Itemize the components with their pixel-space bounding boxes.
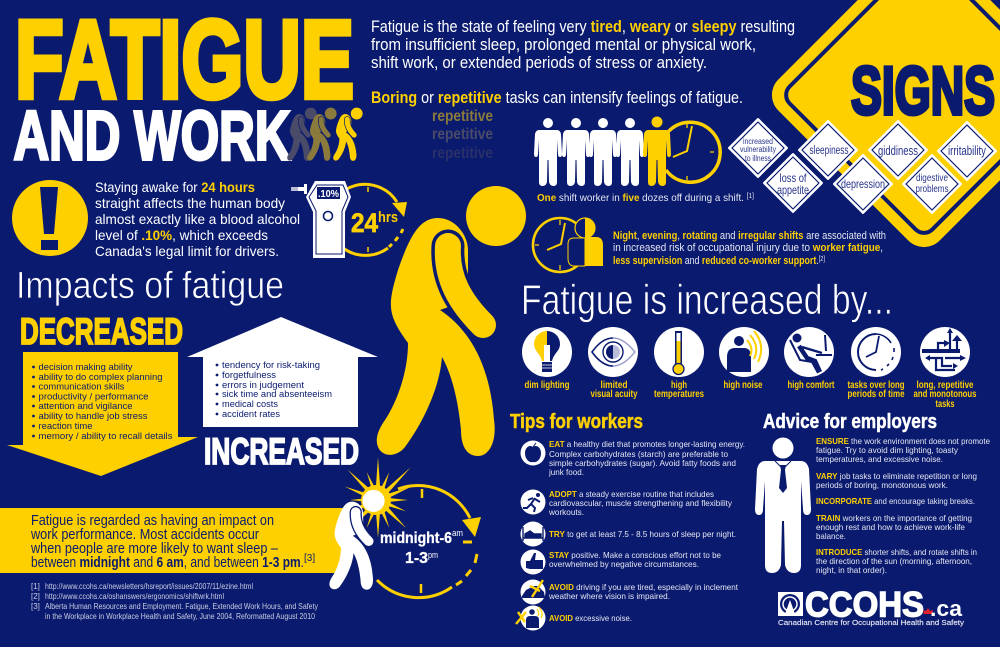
panel: work performance band: Fatigue is regarded as having an impact on bbox=[31, 513, 274, 529]
icon: exclamation bbox=[12, 180, 88, 256]
icon: bed bbox=[523, 527, 543, 541]
heading: fatigue is increased by: Fatigue is increased by... bbox=[521, 276, 893, 323]
text: tips: ADOPT a steady exercise routine that includes bbox=[549, 489, 714, 499]
arrow: up bbox=[187, 317, 378, 427]
text: tips: Complex carbohydrates (starch) are preferable to bbox=[549, 449, 728, 459]
icon: noise with cross bbox=[516, 607, 542, 628]
icon: 24 hour clock: hrs bbox=[378, 209, 398, 226]
icon: breathalyzer: .10% bbox=[318, 189, 339, 200]
title: fatigue: FATIGUE bbox=[15, 0, 354, 122]
text: fading repetitive: repetitive bbox=[432, 108, 493, 125]
panel: signs road sign bbox=[763, 0, 1000, 256]
text: one in five: [1] bbox=[747, 193, 754, 200]
panel: sign diamonds bbox=[729, 119, 996, 213]
text: advice: periods of boring, monotonous work. bbox=[816, 480, 948, 490]
panel: advice for employers bbox=[755, 411, 990, 575]
icon: breathalyzer bbox=[291, 181, 351, 258]
text: one in five: One shift worker in five dozes off during a shift. bbox=[537, 192, 751, 204]
logo: ccohs: .ca bbox=[930, 596, 963, 621]
icon: sun bbox=[340, 457, 413, 538]
list: increased items: accident rates bbox=[222, 409, 281, 419]
text: advice: INTRODUCE shorter shifts, and rotate shifts in bbox=[816, 547, 977, 557]
text: clock times: pm bbox=[428, 550, 438, 560]
panel: sign diamonds: giddiness bbox=[878, 144, 918, 158]
text: tips: TRY to get at least 7.5 - 8.5 hours of sleep per night. bbox=[549, 529, 736, 539]
text: factor labels: high noise bbox=[724, 380, 763, 391]
icon: dim lighting bbox=[534, 331, 560, 372]
list: increased items: sick time and absenteeism bbox=[222, 389, 332, 399]
icon: clock bbox=[666, 122, 720, 182]
icon: high temperatures bbox=[673, 331, 684, 374]
list: decreased items: communication skills bbox=[38, 382, 125, 392]
text: fading repetitive: repetitive bbox=[432, 126, 493, 143]
text: advice: INCORPORATE and encourage taking breaks. bbox=[816, 496, 975, 506]
text: footnotes: [2] bbox=[31, 592, 40, 601]
text: staying awake bbox=[95, 179, 300, 259]
panel: fatigue factors bbox=[522, 327, 977, 410]
text: advice: ENSURE the work environment does not promote bbox=[816, 436, 990, 446]
text: intro: Fatigue is the state of feeling very tired, weary or sleepy resulting bbox=[371, 18, 795, 36]
panel: sign diamonds: increased bbox=[743, 137, 773, 146]
list: increased items: tendency for risk-taking bbox=[222, 360, 320, 370]
text: footnotes: [3] bbox=[31, 602, 40, 611]
text: advice: enough rest and how to achieve work-life bbox=[816, 522, 965, 532]
panel: work performance band: work performance. Most accidents occur bbox=[30, 527, 259, 543]
panel: sign diamonds: sleepiness bbox=[810, 145, 849, 157]
panel: sign diamonds: problems bbox=[916, 184, 948, 195]
text: footnotes: http://www.ccohs.ca/newsletters/hsreport/issues/2007/11/ezine.html bbox=[45, 582, 253, 591]
text: intro bbox=[371, 18, 795, 107]
panel: sign diamonds: loss of bbox=[780, 171, 807, 185]
text: factor labels: periods of time bbox=[848, 389, 905, 400]
text: clock times: midnight-6 bbox=[380, 530, 452, 547]
text: footnotes: [1] bbox=[31, 582, 40, 591]
icon: fading walkers bbox=[287, 108, 363, 161]
panel: work performance band: [3] bbox=[304, 553, 315, 564]
text: advice: balance. bbox=[816, 531, 846, 541]
list: increased items: errors in judgement bbox=[222, 380, 305, 390]
heading: tips: Tips for workers bbox=[510, 411, 643, 433]
heading: advice: Advice for employers bbox=[763, 411, 937, 433]
text: footnotes bbox=[31, 582, 318, 621]
panel: night shifts bbox=[533, 218, 886, 272]
heading: increased: INCREASED bbox=[204, 431, 359, 472]
text: factor labels: and monotonous bbox=[914, 389, 977, 400]
text: tips: AVOID excessive noise. bbox=[549, 613, 632, 623]
text: advice: fatigue. Try to avoid dim lighting, toasty bbox=[816, 445, 959, 455]
arrow: down bbox=[7, 352, 198, 476]
icon: midnight clock and walker bbox=[329, 457, 481, 598]
logo: ccohs bbox=[778, 586, 964, 627]
text: tips: STAY positive. Make a conscious effort not to be bbox=[549, 550, 721, 560]
text: tips: overwhelmed by negative circumstances. bbox=[549, 559, 699, 569]
panel: night shifts: in increased risk of occupational injury due to worker fatigue, bbox=[613, 242, 883, 254]
text: footnotes: Alberta Human Resources and Employment. Fatigue, Extended Work Hours, and Safety bbox=[45, 602, 318, 611]
text: tips: weather where vision is impaired. bbox=[548, 591, 670, 601]
text: advice: temperatures, and excessive noise. bbox=[816, 454, 943, 464]
icon: high noise bbox=[727, 331, 761, 372]
text: tips bbox=[548, 439, 745, 623]
panel: decreased bbox=[7, 311, 198, 476]
text: factor labels bbox=[524, 380, 977, 410]
text: staying awake: Staying awake for 24 hours bbox=[95, 179, 255, 195]
panel: sign diamonds: irritability bbox=[948, 144, 987, 158]
panel: night shifts: less supervision and reduced co-worker support. bbox=[613, 255, 844, 267]
icon: limited visual acuity bbox=[592, 338, 635, 366]
icon: car with cross bbox=[522, 580, 545, 598]
icon: thumbs up bbox=[526, 553, 543, 569]
panel: sign diamonds: vulnerability bbox=[740, 145, 776, 154]
text: tips: EAT a healthy diet that promotes longer-lasting energy. bbox=[549, 439, 745, 449]
text: fading repetitive bbox=[432, 108, 493, 162]
text: advice: TRAIN workers on the importance of getting bbox=[816, 513, 972, 523]
icon: 24 hour clock bbox=[343, 184, 407, 255]
list: increased items: medical costs bbox=[222, 399, 279, 409]
text: advice: VARY job tasks to eliminate repetition or long bbox=[816, 471, 977, 481]
panel: night shifts: [2] bbox=[819, 256, 825, 263]
text: staying awake: Canada's legal limit for drivers. bbox=[95, 243, 279, 259]
text: advice bbox=[816, 436, 990, 575]
icon: tasks over long periods bbox=[858, 334, 894, 370]
text: clock times: am bbox=[452, 528, 463, 538]
text: tips: AVOID driving if you are tired, especially in inclement bbox=[549, 582, 739, 592]
heading: impacts of fatigue: Impacts of fatigue bbox=[16, 265, 284, 307]
panel: tips for workers bbox=[510, 411, 745, 630]
list: increased items bbox=[216, 360, 332, 419]
text: staying awake: straight affects the human body bbox=[95, 195, 285, 211]
text: staying awake: level of .10%, which exceeds bbox=[95, 227, 268, 243]
text: tips: cardiovascular, muscle strengthening and flexibility bbox=[549, 498, 733, 508]
list: decreased items: productivity / performance bbox=[38, 392, 148, 402]
text: factor labels: temperatures bbox=[654, 389, 704, 400]
text: footnotes: in the Workplace in Workplace Health and Safety, June 2004, Reformatted August 2010 bbox=[45, 612, 315, 621]
icon: high comfort bbox=[790, 334, 832, 373]
icon: employer figure bbox=[755, 438, 811, 573]
text: factor labels: visual acuity bbox=[590, 389, 638, 400]
text: intro: from insufficient sleep, prolonged mental or physical work, bbox=[371, 36, 756, 54]
text: staying awake: almost exactly like a blood alcohol bbox=[95, 211, 300, 227]
list: decreased items: decision making ability bbox=[38, 362, 133, 372]
list: decreased items: ability to handle job stress bbox=[38, 411, 148, 421]
panel: night shifts: Night, evening, rotating and irregular shifts are associated with bbox=[613, 230, 886, 242]
list: decreased items: ability to do complex planning bbox=[38, 372, 162, 382]
text: tips: simple carbohydrates (sugar). Avoid fatty foods and bbox=[549, 458, 736, 468]
text: advice: the direction of the sun (morning, afternoon, bbox=[816, 556, 972, 566]
panel: sign diamonds: digestive bbox=[916, 173, 948, 184]
title: and work: AND WORK bbox=[14, 96, 290, 174]
text: footnotes: http://www.ccohs.ca/oshanswers/ergonomics/shiftwrk.html bbox=[45, 592, 224, 601]
list: decreased items: attention and vigilance bbox=[38, 401, 132, 411]
panel: work performance band bbox=[0, 508, 345, 573]
panel: sign diamonds: to illness bbox=[745, 154, 771, 163]
text: factor labels: limited bbox=[600, 380, 628, 391]
icon: long repetitive tasks bbox=[922, 328, 966, 370]
text: intro: shift work, or extended periods of stress or anxiety. bbox=[371, 54, 707, 72]
icon: apple bbox=[525, 443, 541, 462]
text: advice: night, in that order). bbox=[816, 565, 887, 575]
text: tips: workouts. bbox=[548, 507, 584, 517]
text: factor labels: high comfort bbox=[788, 380, 835, 391]
list: increased items: forgetfulness bbox=[222, 370, 277, 380]
list: decreased items: reaction time bbox=[38, 421, 92, 431]
list: decreased items: memory / ability to recall details bbox=[38, 431, 173, 441]
text: clock times: 1-3 bbox=[405, 550, 428, 567]
number: 24 hrs: 24 bbox=[351, 208, 378, 238]
icon: large fatigued walker bbox=[377, 186, 526, 456]
panel: work performance band: between midnight and 6 am, and between 1-3 pm. bbox=[31, 555, 304, 571]
logo: ccohs: Canadian Centre for Occupational Health and Safety bbox=[778, 618, 964, 627]
text: fading repetitive: repetitive bbox=[432, 145, 493, 162]
list: decreased items bbox=[32, 362, 173, 441]
text: factor labels: long, repetitive bbox=[916, 380, 974, 391]
logo: ccohs: CCOHS bbox=[805, 586, 924, 624]
panel: sign diamonds: depression bbox=[841, 177, 885, 191]
text: factor labels: high bbox=[671, 380, 687, 391]
text: factor labels: tasks bbox=[936, 399, 955, 410]
icon: clock and half person bbox=[533, 218, 603, 272]
heading: decreased: DECREASED bbox=[20, 311, 183, 352]
panel: shift workers bbox=[534, 116, 754, 204]
text: factor labels: tasks over long bbox=[848, 380, 904, 391]
text: clock times bbox=[380, 528, 463, 567]
panel: increased bbox=[187, 317, 378, 472]
panel: sign diamonds: appetite bbox=[777, 183, 809, 197]
text: intro: Boring or repetitive tasks can intensify feelings of fatigue. bbox=[371, 89, 743, 107]
text: factor labels: dim lighting bbox=[524, 380, 570, 391]
icon: runner bbox=[523, 493, 540, 512]
panel: work performance band: when people are more likely to want sleep – bbox=[30, 541, 279, 557]
text: tips: junk food. bbox=[548, 467, 584, 477]
